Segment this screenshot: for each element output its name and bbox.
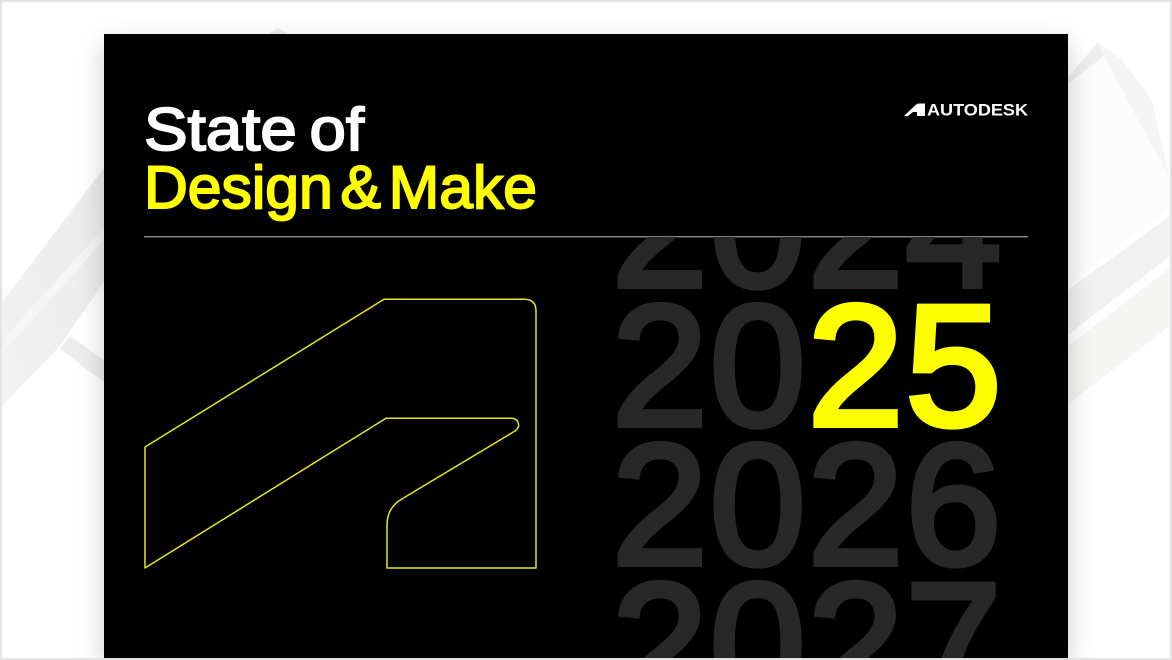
year stack [612, 237, 1003, 658]
title line: State of: State of [144, 96, 364, 163]
decorative shape: right background form [1068, 42, 1170, 404]
icon: Autodesk A outline [145, 299, 536, 568]
icon: Autodesk mark [904, 104, 925, 116]
logo: Autodesk [904, 100, 1029, 120]
header divider [144, 236, 1028, 238]
logo wordmark: AUTODESK [927, 100, 1029, 120]
title [144, 96, 537, 221]
title line: Design & Make: Design & Make [144, 154, 537, 221]
decorative shape: left background form [2, 28, 288, 406]
